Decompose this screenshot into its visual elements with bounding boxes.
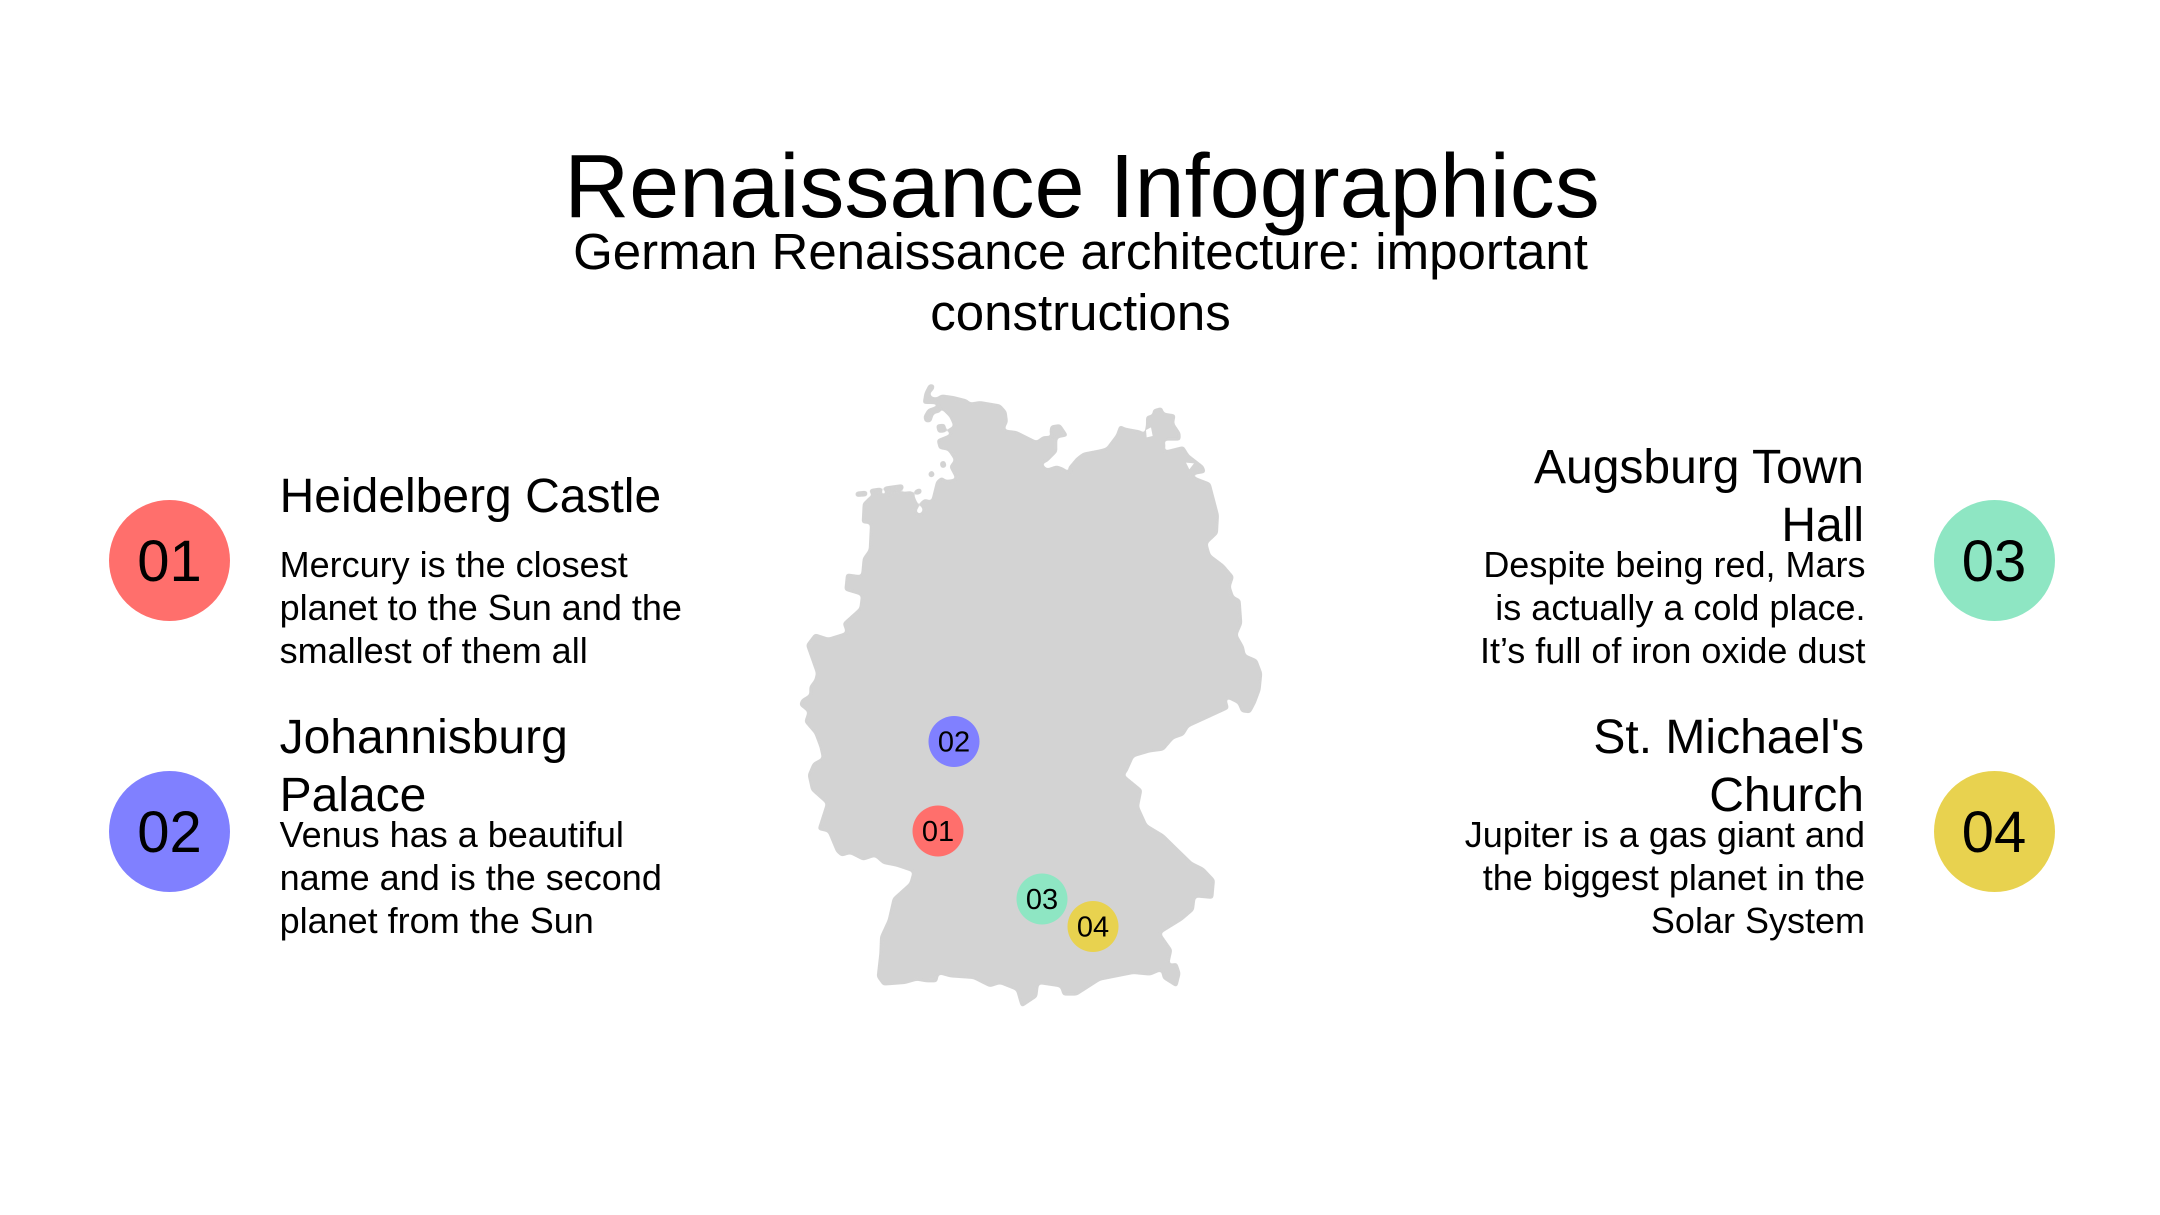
heading [1593,711,1864,822]
marker 01: 01 [922,816,954,848]
subtitle: German Renaissance architecture: important [573,222,1588,280]
heading: Church [1709,769,1864,822]
number badge 01 [109,500,230,620]
panel: St. Michael's Church [1465,711,2055,941]
marker 03: 03 [1026,884,1058,916]
panel: Heidelberg Castle [109,470,682,671]
description: Despite being red, Mars [1483,544,1866,585]
heading [1534,441,1864,552]
marker 03 [1016,874,1068,924]
number badge 03 [1934,500,2054,620]
marker 02: 02 [938,726,970,758]
heading: Augsburg Town [1534,441,1864,494]
description: smallest of them all [280,630,588,671]
heading [280,711,568,822]
description: planet to the Sun and the [280,587,682,628]
number badge 03: 03 [1962,528,2026,594]
heading: Palace [280,769,426,822]
panel: Johannisburg Palace [109,711,662,941]
subtitle: constructions [930,284,1231,340]
marker 02 [928,716,980,767]
description: the biggest planet in the [1483,857,1865,898]
description [280,544,682,671]
description: Solar System [1651,900,1865,941]
number badge 04: 04 [1962,800,2026,864]
heading: St. Michael's [1593,711,1864,764]
number badge 04 [1934,770,2054,892]
description: planet from the Sun [280,900,594,941]
description [1480,544,1866,671]
heading: Hall [1781,499,1864,552]
number badge 02 [109,770,230,892]
heading: Heidelberg Castle [280,470,661,522]
number badge 02: 02 [137,800,202,864]
description: is actually a cold place. [1495,587,1866,628]
map: Germany silhouette [800,385,1262,1007]
description: name and is the second [280,857,662,898]
number badge 01: 01 [137,528,202,594]
marker 01 [912,806,964,856]
title: Renaissance Infographics [564,137,1600,237]
marker 04: 04 [1077,912,1109,944]
description: Venus has a beautiful [280,814,624,855]
description [280,814,662,941]
subtitle [573,222,1588,340]
description: Jupiter is a gas giant and [1465,814,1865,855]
description: It’s full of iron oxide dust [1480,630,1866,671]
marker 04 [1068,901,1118,952]
panel: Augsburg Town Hall [1480,441,2055,671]
heading: Johannisburg [280,711,568,764]
description [1465,814,1865,941]
description: Mercury is the closest [280,544,628,585]
